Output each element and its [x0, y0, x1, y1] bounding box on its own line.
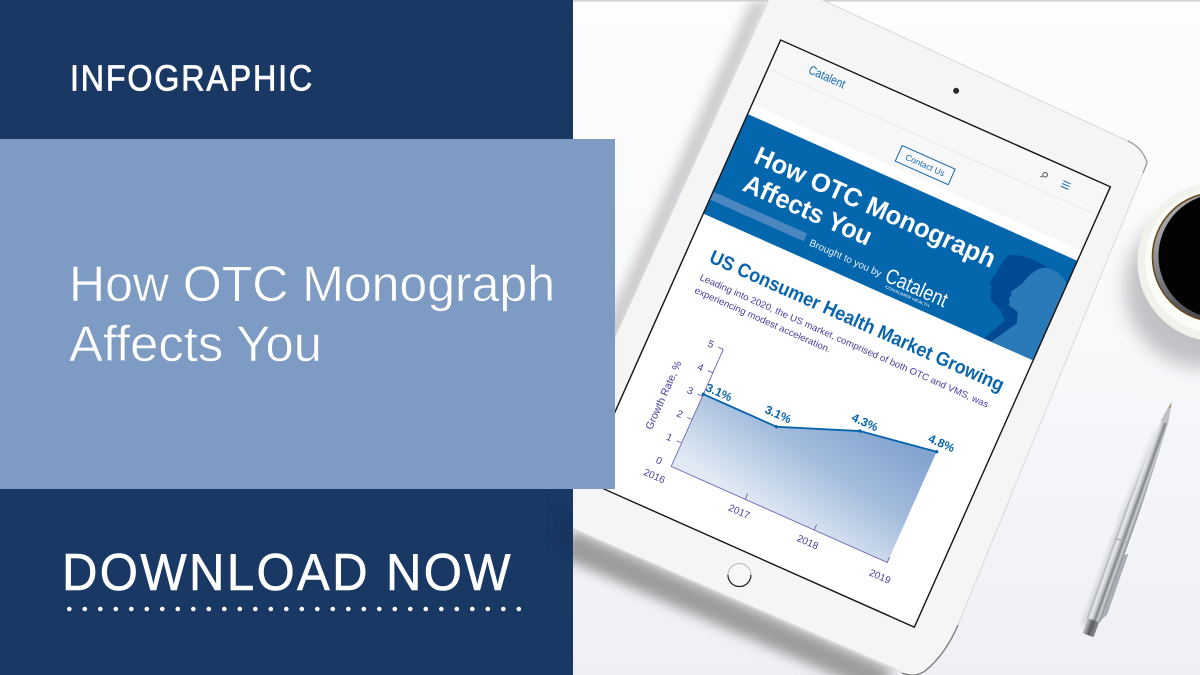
area chart: growth rate	[643, 340, 954, 584]
tablet screen	[585, 40, 1110, 627]
y axis labels: 2	[675, 409, 685, 421]
call to action: download now: DOWNLOAD NOW	[62, 544, 513, 602]
pen clip	[1101, 553, 1129, 622]
website header	[768, 66, 1097, 216]
y axis labels: 3	[685, 385, 695, 398]
x axis labels: 2018	[795, 533, 820, 553]
panel: top navy	[0, 0, 573, 139]
byline: Catalent	[882, 264, 951, 312]
banner title: How OTC Monograph	[750, 140, 1001, 274]
icon: search	[1040, 172, 1048, 178]
dotted underline	[69, 607, 520, 611]
button: Contact Us: Contact Us	[904, 152, 946, 178]
x axis labels	[642, 465, 893, 587]
line	[704, 394, 936, 452]
main title: How OTC Monograph	[69, 256, 555, 312]
value labels: 4.8%	[926, 431, 957, 455]
chart area	[672, 396, 936, 562]
byline	[809, 239, 948, 308]
main title: Affects You	[69, 316, 322, 372]
byline: Brought to you by	[807, 238, 883, 280]
y axis labels: 5	[706, 339, 716, 351]
heads silhouette	[984, 255, 1066, 360]
x axis labels: 2016	[642, 467, 667, 486]
icon: front camera	[952, 87, 960, 95]
y axis title: Growth Rate, %	[643, 359, 685, 432]
value labels: 3.1%	[704, 380, 735, 404]
panel: bottom navy	[0, 489, 573, 675]
paragraph: experiencing modest acceleration.	[693, 284, 833, 355]
banner title: Affects You	[739, 168, 877, 252]
coffee cup	[1125, 182, 1200, 368]
x axis labels: 2019	[867, 568, 892, 587]
value labels: 3.1%	[763, 402, 794, 426]
paragraph: Leading into 2020, the US market, comprised of both OTC and VMS, was	[698, 271, 991, 410]
logo: Catalent: Catalent	[806, 63, 848, 92]
shadows	[558, 530, 893, 675]
y axis labels: 4	[695, 362, 705, 374]
tablet	[544, 0, 1147, 675]
accent bar	[710, 192, 807, 241]
pen	[1080, 399, 1182, 639]
label: infographic: INFOGRAPHIC	[70, 58, 314, 98]
value labels	[706, 384, 954, 452]
y axis labels: 0	[654, 455, 664, 468]
axes and ticks	[670, 346, 890, 564]
x axis labels: 2017	[726, 503, 752, 522]
section heading: US Consumer Health Market Growing	[706, 246, 1007, 396]
byline: CONSUMER HEALTH	[884, 284, 930, 308]
y axis labels: 1	[664, 432, 674, 444]
panel: title block	[0, 139, 615, 489]
tablet body	[544, 0, 1147, 675]
icon: menu	[1061, 181, 1071, 189]
value labels: 4.3%	[850, 410, 881, 434]
banner	[703, 114, 1077, 360]
button: Contact Us	[895, 146, 955, 185]
y axis labels	[654, 339, 716, 468]
icon: home button	[723, 560, 758, 595]
main title	[69, 256, 555, 372]
